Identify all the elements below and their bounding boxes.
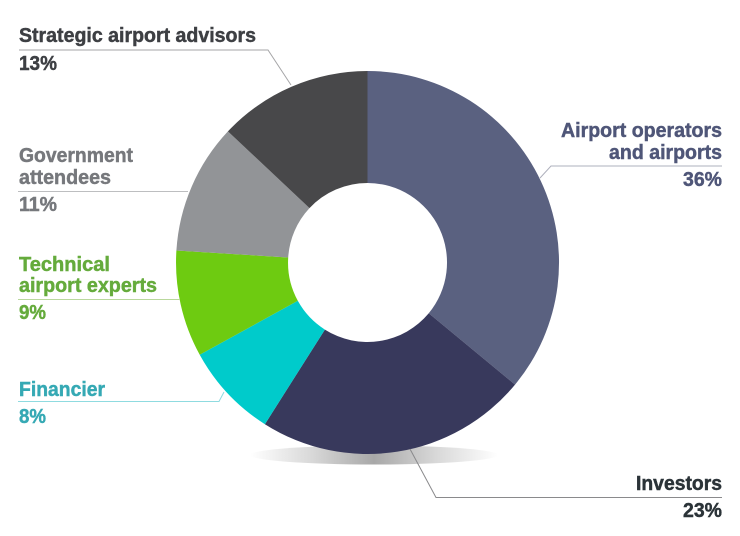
segment: investors 23% [265,313,515,454]
segment: financier 8% [200,301,325,424]
label: investors: 23% [683,500,722,522]
label: airport operators and airports [540,120,722,191]
segment: strategic airport advisors 13% [228,71,368,208]
label: technical airport experts [18,254,180,324]
label: investors [410,449,722,522]
label: airport operators and airports: and airports [609,142,722,164]
label: government attendees: Government [19,145,133,167]
segment: government attendees 11% [176,131,310,258]
label: financier [18,379,224,428]
label: technical airport experts: airport experts [19,275,157,297]
donut shadow [250,446,498,464]
label: airport operators and airports: Airport operators [561,120,722,142]
label: strategic airport advisors: 13% [19,53,57,75]
label: financier: Financier [19,379,105,401]
segment: airport operators and airports 36% [368,71,559,385]
label: technical airport experts: 9% [19,302,46,324]
label: government attendees: attendees [19,167,111,189]
label: strategic airport advisors: Strategic airport advisors [19,25,256,47]
label: strategic airport advisors [19,25,291,85]
label: government attendees [18,145,188,216]
label: financier: 8% [19,406,46,428]
donut chart [176,71,559,454]
segment: technical airport experts 9% [176,250,298,355]
label: government attendees: 11% [19,194,57,216]
label: technical airport experts: Technical [19,254,110,276]
label: investors: Investors [636,473,722,495]
label: airport operators and airports: 36% [683,169,722,191]
